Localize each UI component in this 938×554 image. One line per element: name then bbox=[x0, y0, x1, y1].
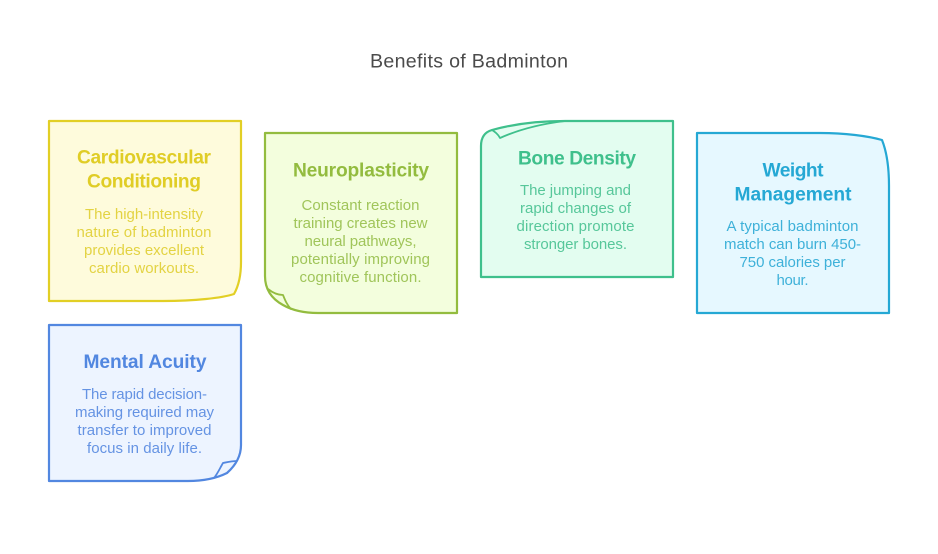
panel: Mental Acuity bbox=[49, 325, 241, 481]
card shape: sky blue note bbox=[697, 133, 889, 313]
heading: Mental Acuity bbox=[84, 352, 207, 373]
body text: 750 calories per bbox=[740, 254, 846, 271]
page curl fold bbox=[268, 289, 291, 309]
body text: match can burn 450- bbox=[724, 236, 861, 253]
panel: Cardiovascular Conditioning bbox=[49, 121, 241, 301]
panel: Weight Management bbox=[697, 133, 889, 313]
body text: direction promote bbox=[516, 218, 634, 235]
heading: Weight bbox=[762, 160, 824, 182]
body text: rapid changes of bbox=[520, 200, 632, 217]
heading: Bone Density bbox=[518, 148, 636, 170]
body text: The high-intensity bbox=[85, 206, 204, 223]
body text: focus in daily life. bbox=[87, 440, 202, 457]
body text: stronger bones. bbox=[524, 236, 627, 253]
body text: potentially improving bbox=[291, 251, 430, 268]
heading: Conditioning bbox=[87, 172, 201, 192]
body text: training creates new bbox=[294, 215, 428, 232]
body text: hour. bbox=[776, 272, 808, 289]
body text: provides excellent bbox=[84, 242, 205, 259]
card shape: teal note bbox=[481, 121, 673, 277]
body text: neural pathways, bbox=[304, 233, 416, 250]
title: Benefits of Badminton bbox=[370, 50, 568, 72]
card shape: yellow note bbox=[49, 121, 241, 301]
heading: Management bbox=[734, 184, 852, 206]
page curl fold bbox=[492, 121, 565, 138]
card shape: blue note bbox=[49, 325, 241, 481]
body text: A typical badminton bbox=[726, 218, 858, 235]
body text: cardio workouts. bbox=[89, 260, 199, 277]
body text: cognitive function. bbox=[300, 269, 422, 286]
card shape: green note bbox=[265, 133, 457, 313]
body text: nature of badminton bbox=[76, 224, 212, 241]
heading: Neuroplasticity bbox=[293, 160, 429, 182]
body text: The jumping and bbox=[520, 182, 631, 199]
body text: Constant reaction bbox=[302, 197, 420, 214]
panel: Neuroplasticity bbox=[265, 133, 457, 313]
page curl fold bbox=[214, 461, 237, 478]
body text: transfer to improved bbox=[78, 422, 212, 439]
heading: Cardiovascular bbox=[77, 148, 212, 168]
body text: making required may bbox=[75, 404, 214, 421]
body text: The rapid decision- bbox=[82, 386, 207, 403]
panel: Bone Density bbox=[481, 121, 673, 277]
